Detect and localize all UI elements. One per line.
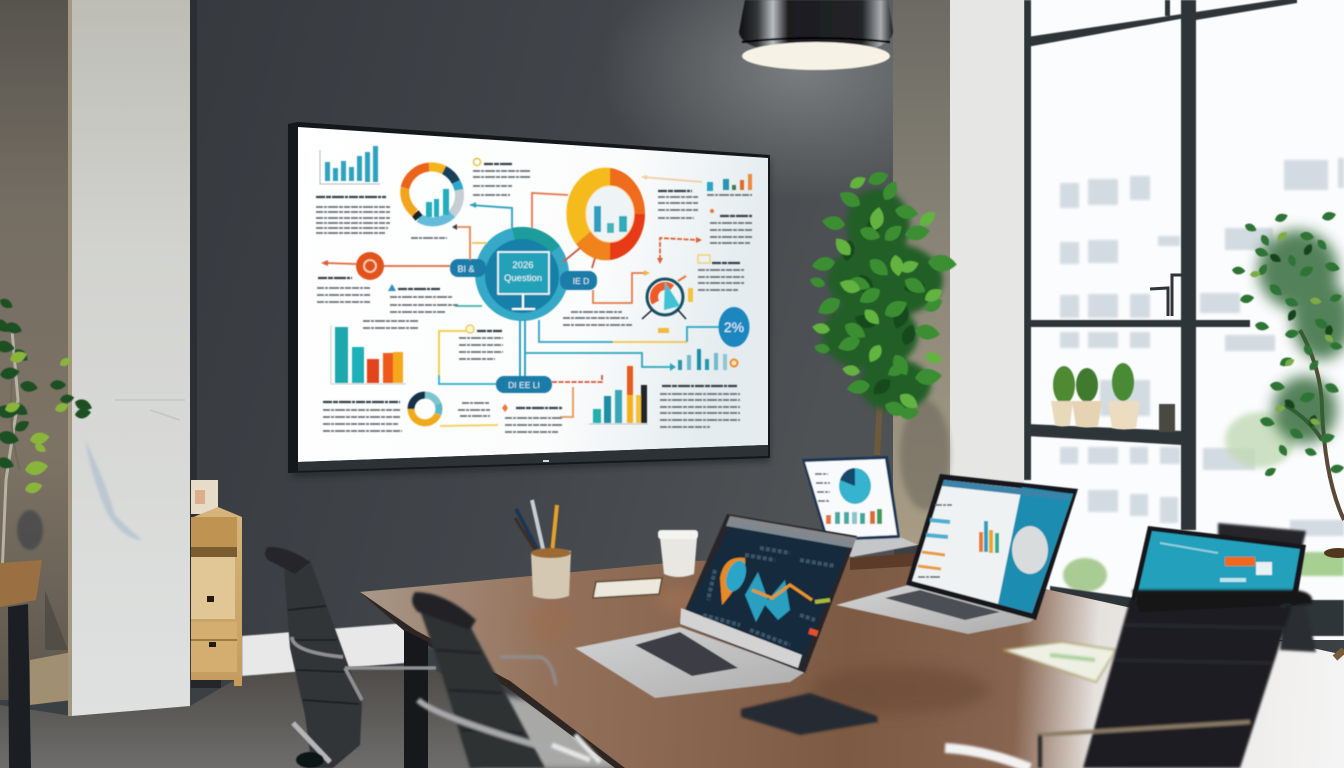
chair: behind right laptop bbox=[1218, 523, 1316, 652]
pencil holder bbox=[515, 500, 571, 599]
pill: bottom bbox=[496, 376, 552, 393]
pendant lamp bbox=[739, 0, 893, 70]
wallet on table bbox=[741, 693, 878, 735]
floor glare under table bbox=[470, 690, 640, 768]
notebook bbox=[593, 578, 662, 598]
plant: right ficus tree bbox=[1232, 210, 1344, 658]
percent badge: 2% bbox=[724, 319, 744, 335]
chair: left bbox=[265, 547, 436, 768]
text block: top right bbox=[658, 191, 698, 218]
laptop: far right teal screen bbox=[1130, 526, 1306, 605]
pill: right bbox=[560, 271, 597, 290]
donut chart with bars bbox=[405, 167, 460, 222]
infographic on screen bbox=[316, 146, 753, 432]
arrowheads bbox=[321, 175, 702, 371]
chair: foreground right bbox=[945, 590, 1312, 768]
floor bbox=[0, 664, 660, 768]
pill: bottom: DI EE LI bbox=[508, 380, 540, 390]
shelf pots and small plants bbox=[1051, 363, 1175, 432]
table leg bbox=[404, 630, 428, 768]
text block: donut note bbox=[458, 403, 490, 416]
wooden cabinet bbox=[191, 480, 242, 688]
pill: left bbox=[450, 259, 486, 277]
small bars: top right bbox=[707, 174, 752, 195]
hub label: 2026 bbox=[512, 260, 534, 271]
text block: left middle bbox=[317, 278, 370, 302]
left plant bbox=[0, 296, 94, 575]
window frame bbox=[1024, 0, 1344, 636]
laptop: front with dark dashboard bbox=[575, 514, 857, 698]
tablet notebook on table bbox=[1003, 642, 1116, 682]
text block: top left bbox=[316, 197, 390, 233]
small bars: right bbox=[678, 349, 738, 370]
wall monitor bbox=[288, 122, 770, 478]
bar chart: lower left bbox=[331, 325, 406, 384]
side table bbox=[0, 560, 42, 768]
percent badge bbox=[718, 307, 750, 347]
pill: right: IE D bbox=[573, 276, 589, 286]
text block: under connector bbox=[563, 312, 632, 325]
white column bbox=[68, 0, 190, 716]
text block: right 1 bbox=[710, 209, 753, 243]
central hub bbox=[475, 227, 569, 321]
gauge icon bbox=[642, 276, 693, 333]
coffee cup bbox=[658, 530, 698, 577]
text block: top center bbox=[473, 158, 530, 195]
connectors bbox=[325, 177, 720, 426]
left wall bbox=[0, 0, 72, 705]
central hub: Question bbox=[504, 273, 542, 284]
text block: lower left bbox=[323, 402, 402, 431]
window with blurred building outside bbox=[1024, 0, 1344, 640]
center plant bbox=[808, 169, 957, 455]
baseboard bbox=[242, 623, 405, 676]
text block: lower center bbox=[502, 404, 562, 432]
window handle bbox=[1150, 275, 1188, 316]
text block: triangle note bbox=[388, 284, 458, 312]
concrete pillar bbox=[893, 0, 951, 545]
text block: right 2 bbox=[698, 255, 745, 290]
laptop: back with pie chart bbox=[802, 456, 918, 557]
text block: yellow icon note bbox=[459, 325, 503, 359]
icon: orange circle bbox=[356, 252, 384, 280]
small donut bbox=[411, 395, 439, 423]
plant shadow on pillar bbox=[900, 400, 950, 510]
wall: dark painted wall bbox=[190, 0, 1000, 650]
bar chart: lower center bbox=[589, 366, 648, 424]
text block: above bar chart bbox=[363, 321, 418, 328]
big ring chart bbox=[566, 168, 645, 260]
pill: left: BI & bbox=[457, 264, 475, 274]
bar chart: top left bbox=[320, 146, 380, 184]
chair: center bbox=[412, 592, 600, 768]
conference table bbox=[360, 553, 1344, 768]
text block: lower right bbox=[660, 386, 740, 427]
white pillar bbox=[950, 0, 1024, 570]
laptop: right with dashboard bbox=[836, 474, 1078, 634]
caption: donut bbox=[411, 237, 447, 239]
